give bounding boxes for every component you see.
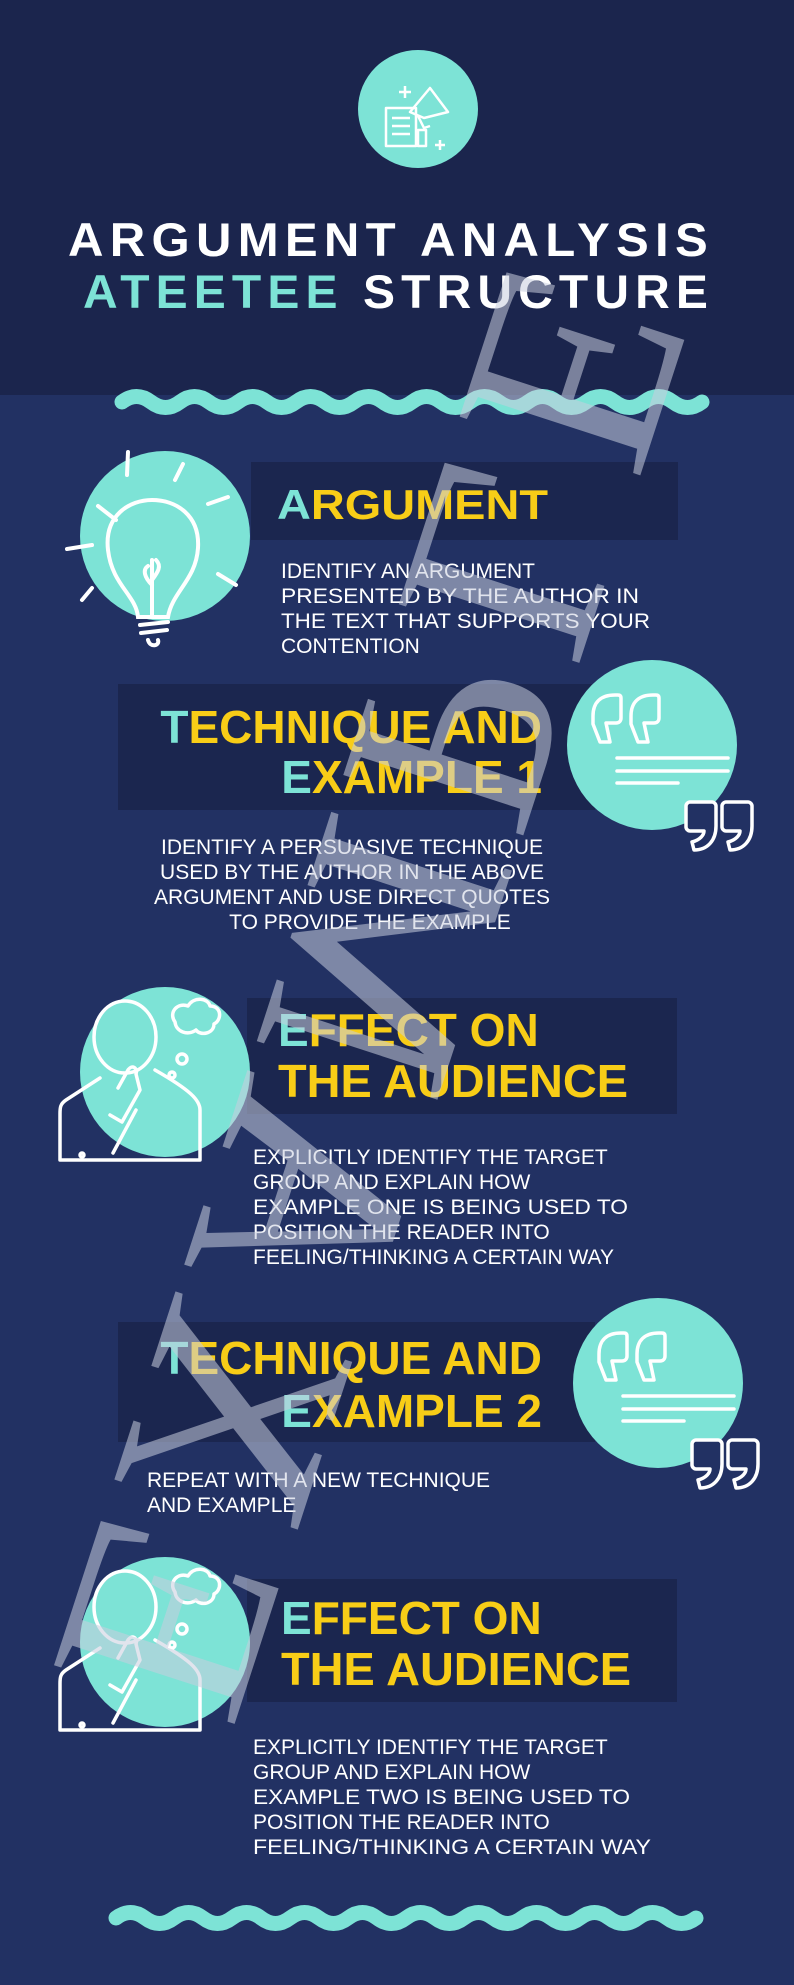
heading: TECHNIQUE AND (160, 1332, 542, 1384)
icon: lightbulb (67, 451, 250, 645)
body text: PRESENTED BY THE AUTHOR IN (281, 585, 639, 608)
body text: GROUP AND EXPLAIN HOW (253, 1761, 531, 1784)
icon: quote (567, 660, 752, 850)
heading: THE AUDIENCE (278, 1055, 628, 1107)
body text: ARGUMENT AND USE DIRECT QUOTES (154, 886, 550, 909)
panel: effect on the audience 1 (60, 987, 677, 1269)
icon: quote (573, 1298, 758, 1488)
title: ATEETEE STRUCTURE (83, 265, 714, 318)
body text: EXAMPLE TWO IS BEING USED TO (253, 1786, 630, 1809)
body text: THE TEXT THAT SUPPORTS YOUR (281, 610, 650, 633)
heading (160, 1332, 542, 1437)
heading (281, 1592, 631, 1695)
body text: AND EXAMPLE (147, 1494, 296, 1517)
body text: REPEAT WITH A NEW TECHNIQUE (147, 1469, 490, 1492)
body text: USED BY THE AUTHOR IN THE ABOVE (160, 861, 544, 884)
body text: EXAMPLE ONE IS BEING USED TO (253, 1196, 628, 1219)
body text: IDENTIFY A PERSUASIVE TECHNIQUE (161, 836, 543, 859)
panel: argument (67, 451, 678, 658)
body text: POSITION THE READER INTO (253, 1811, 550, 1834)
heading: EXAMPLE 2 (281, 1385, 542, 1437)
body text (147, 1469, 490, 1517)
heading (278, 1004, 628, 1107)
body text: EXPLICITLY IDENTIFY THE TARGET (253, 1736, 608, 1759)
body text: EXPLICITLY IDENTIFY THE TARGET (253, 1146, 608, 1169)
body text (154, 836, 550, 934)
heading (160, 701, 542, 803)
header band (0, 0, 794, 395)
body text (253, 1146, 628, 1269)
body text: FEELING/THINKING A CERTAIN WAY (253, 1246, 614, 1269)
heading: EXAMPLE 1 (281, 751, 542, 803)
title: ARGUMENT ANALYSIS (68, 213, 714, 266)
body text: POSITION THE READER INTO (253, 1221, 550, 1244)
panel: effect on the audience 2 (60, 1557, 677, 1859)
icon: megaphone document (358, 50, 478, 168)
body text: CONTENTION (281, 635, 420, 658)
body text (281, 560, 650, 658)
watermark: EXAMPLE: EXAMPLE (0, 237, 757, 1753)
icon: thinking person (60, 987, 250, 1160)
body text: TO PROVIDE THE EXAMPLE (229, 911, 511, 934)
heading: EFFECT ON (281, 1592, 542, 1644)
wave bottom (116, 1912, 696, 1924)
heading: TECHNIQUE AND (160, 701, 542, 753)
heading: ARGUMENT (277, 481, 548, 528)
body text: FEELING/THINKING A CERTAIN WAY (253, 1836, 651, 1859)
heading: EFFECT ON (278, 1004, 539, 1056)
panel: technique and example 1 (118, 660, 752, 934)
heading: THE AUDIENCE (281, 1643, 631, 1695)
title (68, 213, 714, 318)
wave top (122, 396, 702, 408)
body text (253, 1736, 651, 1859)
panel: technique and example 2 (118, 1298, 758, 1517)
icon: thinking person (60, 1557, 250, 1730)
body text: GROUP AND EXPLAIN HOW (253, 1171, 531, 1194)
body text: IDENTIFY AN ARGUMENT (281, 560, 535, 583)
